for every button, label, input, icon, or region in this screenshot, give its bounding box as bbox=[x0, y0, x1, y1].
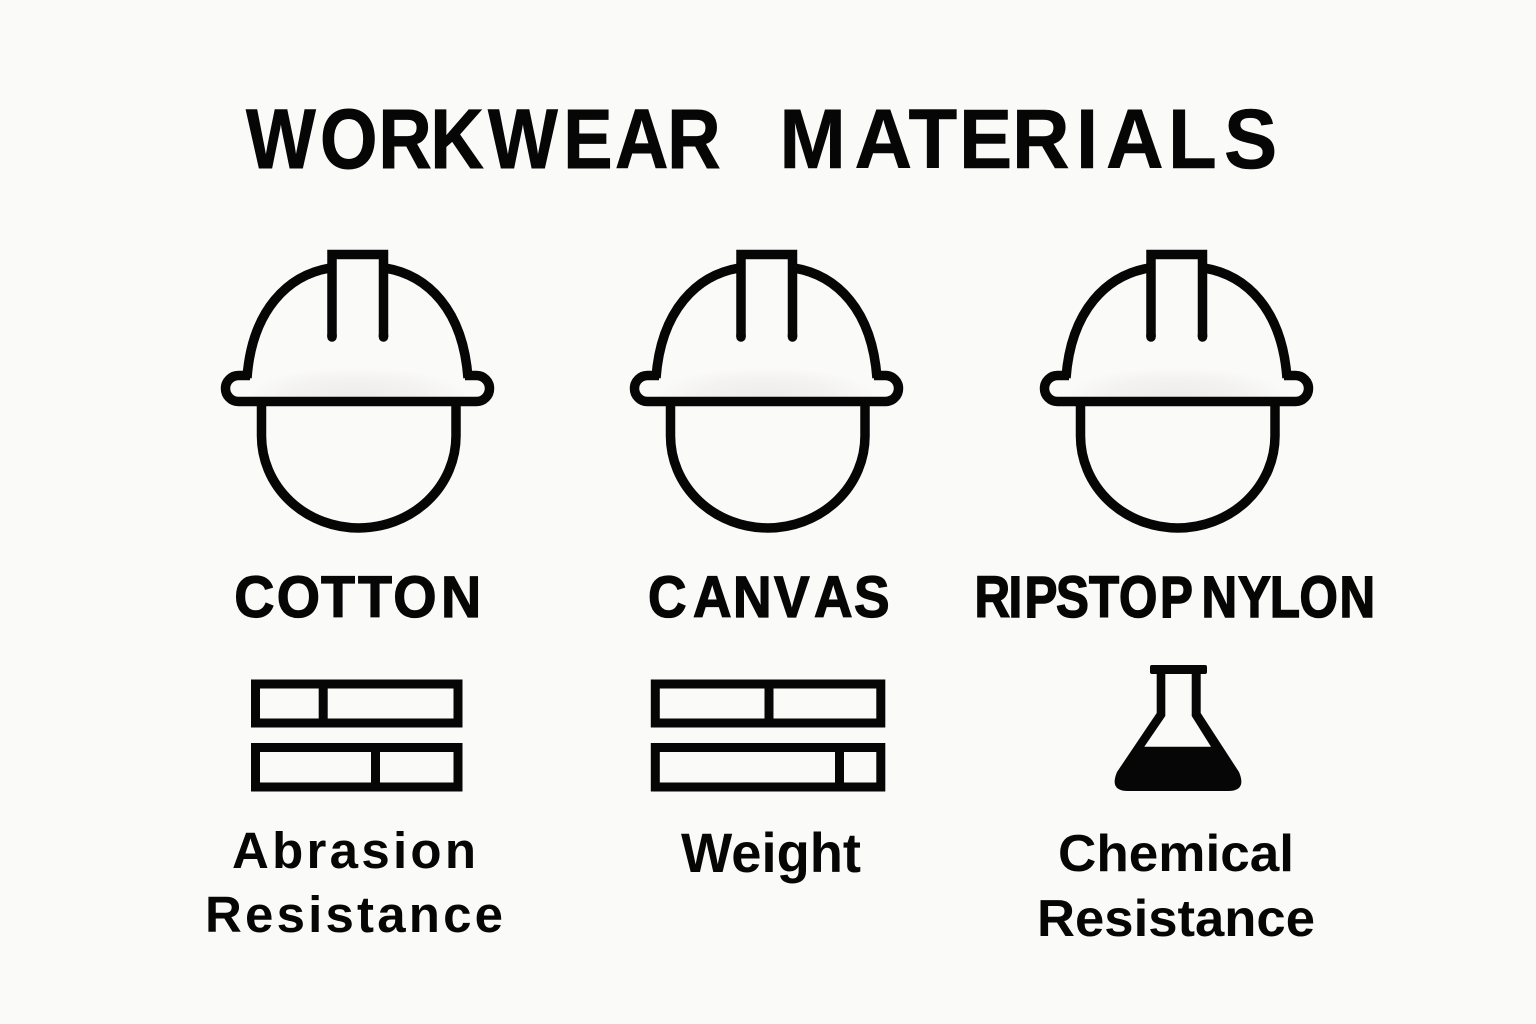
icon: ripstop nylon hard hat bbox=[1044, 254, 1308, 528]
label: abrasion resistance bbox=[205, 822, 503, 943]
icon: canvas hard hat bbox=[634, 254, 898, 528]
icon: weight bars bbox=[655, 684, 881, 787]
label: canvas: CANVAS bbox=[648, 565, 890, 629]
icon: chemical flask bbox=[1115, 665, 1241, 791]
icon: abrasion resistance bars bbox=[256, 684, 458, 787]
label: chemical resistance bbox=[1037, 825, 1315, 948]
title: MATERIALS bbox=[779, 93, 1277, 186]
label: abrasion resistance: Resistance bbox=[205, 886, 503, 943]
label: abrasion resistance: Abrasion bbox=[232, 822, 476, 879]
title bbox=[246, 92, 1277, 186]
label: ripstop nylon: RIPSTOP NYLON bbox=[975, 565, 1375, 630]
label: chemical resistance: Chemical bbox=[1058, 825, 1294, 883]
label: chemical resistance: Resistance bbox=[1037, 890, 1315, 948]
icon: cotton hard hat bbox=[226, 254, 490, 528]
title: WORKWEAR bbox=[246, 92, 721, 186]
label: cotton: COTTON bbox=[234, 566, 481, 630]
label: weight: Weight bbox=[681, 821, 861, 884]
